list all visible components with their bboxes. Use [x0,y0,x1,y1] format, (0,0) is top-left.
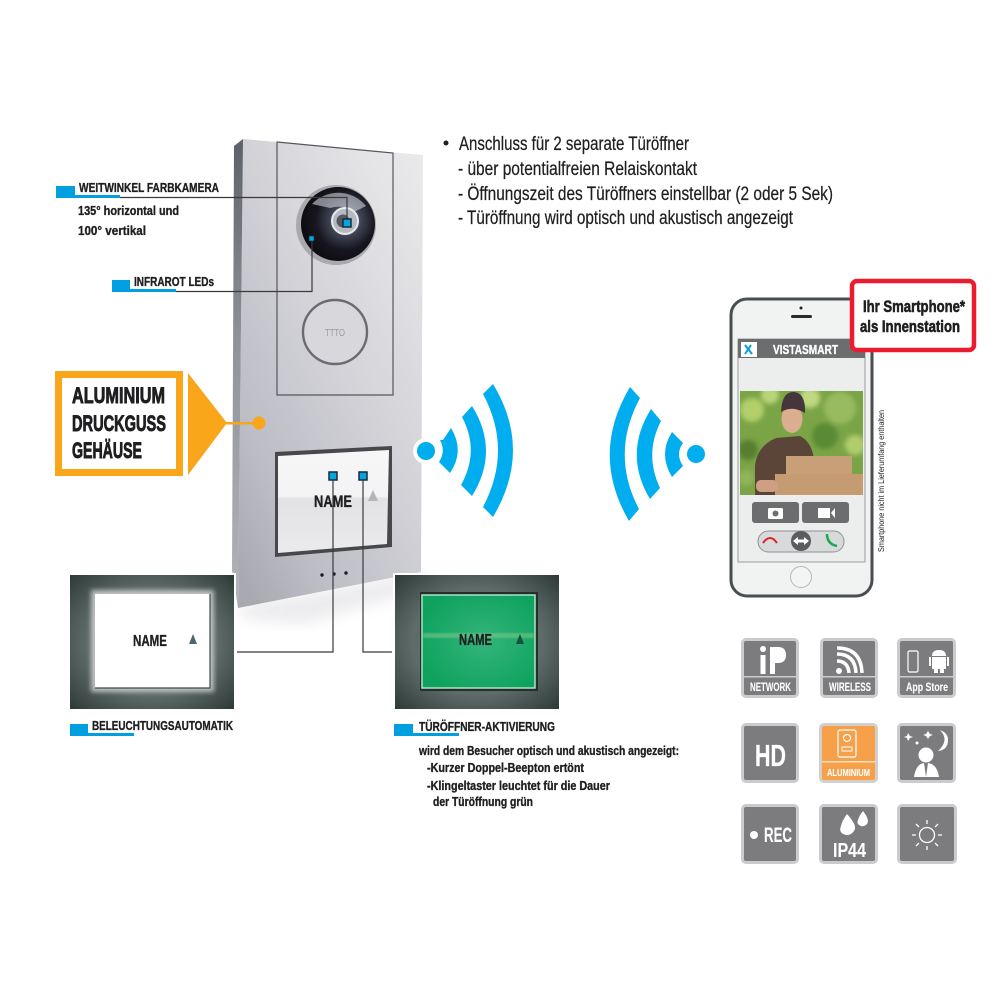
bullet list: door opener: Anschluss für 2 separate Türöffner [459,134,690,155]
panel: illuminated button inset [68,573,236,711]
speaker holes [320,571,348,577]
footnote: vertical: Smartphone nicht im Lieferumfang enthalten [876,410,886,552]
label: Infrarot LEDs: INFRAROT LEDs [134,274,214,289]
label: Türöffner-Aktivierung text: der Türöffnung grün [433,795,533,809]
icon: aluminium [819,723,878,783]
icon: wireless [820,638,878,698]
label: Weitwinkel Farbkamera [56,180,219,238]
callout: Ihr Smartphone: Ihr Smartphone* [863,297,965,316]
icon: REC: REC [764,824,792,847]
icon: HD: HD [755,738,786,773]
icon: IP network [741,638,799,698]
callout: Aluminium Druckguss Gehäuse: GEHÄUSE [72,438,142,463]
label: Türöffner-Aktivierung text: wird dem Besucher optisch und akustisch angezeigt: [418,744,679,758]
name plate button: NAME [314,492,352,511]
icon: bell push button [303,300,367,364]
icon: wireless: WIRELESS [829,680,871,694]
camera module frame [277,142,393,395]
icon: wifi signal left [413,384,513,517]
icon: bell [516,634,524,644]
callout: Aluminium Druckguss Gehäuse [58,373,266,475]
icon: wifi signal right [610,387,705,521]
callout: Ihr Smartphone [852,281,974,350]
home button [790,566,812,588]
icon: IP network: NETWORK [750,680,791,694]
callout lines [120,198,392,652]
icon: app store [897,638,956,698]
photo: delivery man [738,386,865,496]
app buttons [752,502,849,523]
icon: bell [189,634,197,644]
panel: illuminated button inset: NAME [133,633,167,650]
panel: green activated button inset: NAME [459,632,492,649]
name plate button [275,446,392,557]
arrow: orange pointer [188,373,266,475]
bullet list: door opener: - Türöffnung wird optisch und akustisch angezeigt [458,208,794,229]
icon: HD [741,723,799,783]
callout: Aluminium Druckguss Gehäuse: DRUCKGUSS [72,411,166,436]
icon: aluminium: ALUMINIUM [827,767,870,779]
label: Türöffner-Aktivierung text [394,719,679,809]
label: Türöffner-Aktivierung text: -Kurzer Doppel-Beepton ertönt [427,761,585,775]
icon: night vision [897,723,956,783]
label: Weitwinkel Farbkamera: 135° horizontal und [78,203,179,218]
label: Türöffner-Aktivierung text: TÜRÖFFNER-AKTIVIERUNG [419,719,555,734]
callout: Aluminium Druckguss Gehäuse: ALUMINIUM [72,383,165,408]
device: door station panel [232,139,440,625]
app header [738,339,865,358]
callout: Ihr Smartphone: als Innenstation [860,317,960,336]
icon: camera lens [296,185,376,265]
icon: IP44 [819,804,878,864]
label: Beleuchtungsautomatik [70,718,233,736]
callout markers [309,219,367,480]
bullet list: door opener: - Öffnungszeit des Türöffners einstellbar (2 oder 5 Sek) [458,184,833,205]
bullet list: door opener: - über potentialfreien Relaiskontakt [458,159,698,180]
icon: IP44: IP44 [833,840,867,862]
icon: bell push button: TTTO [325,328,345,339]
app header: VISTASMART [773,342,838,357]
label: Infrarot LEDs [112,274,214,292]
label: Beleuchtungsautomatik: BELEUCHTUNGSAUTOMATIK [92,718,233,733]
icon: REC [741,804,799,864]
label: Türöffner-Aktivierung text: -Klingeltaster leuchtet für die Dauer [427,779,610,793]
panel: green activated button inset [393,573,560,711]
smartphone [731,299,872,596]
bullet list: door opener [444,134,833,229]
icon: sun [897,804,957,864]
label: Weitwinkel Farbkamera: 100° vertikal [78,223,146,238]
label: Weitwinkel Farbkamera: WEITWINKEL FARBKAMERA [79,180,219,195]
icon: bell [368,490,378,501]
icon: app store: App Store [906,680,948,694]
call slider [758,531,844,552]
